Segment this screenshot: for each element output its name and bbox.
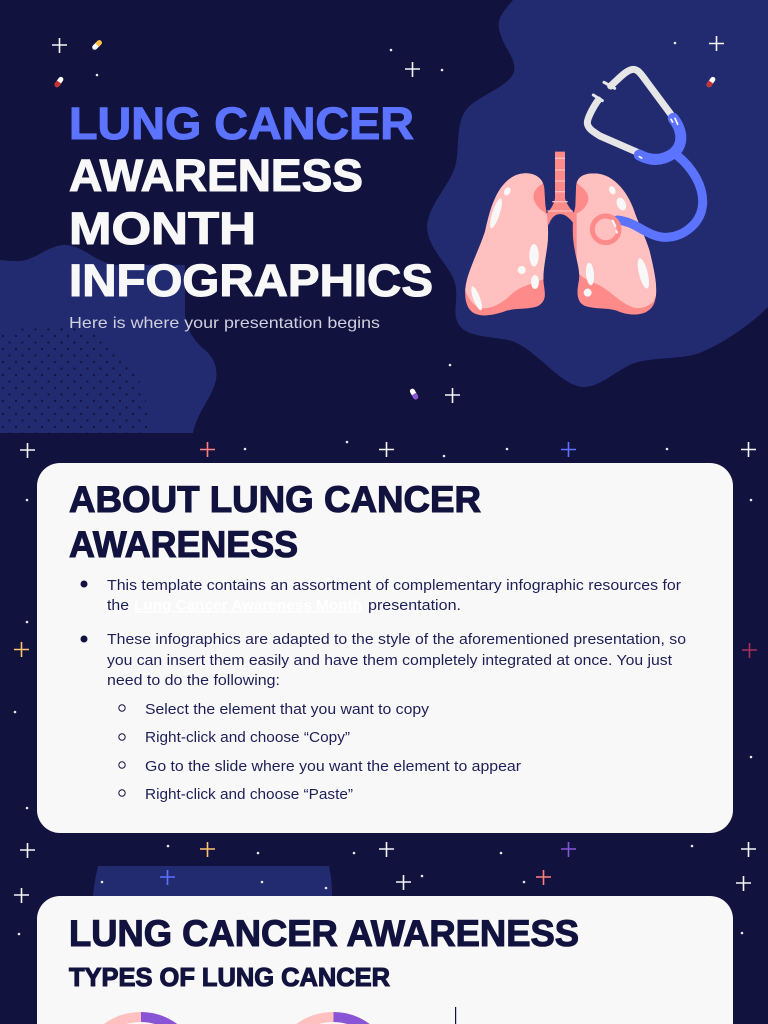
title <box>69 98 433 306</box>
icon: purple pill <box>409 388 419 400</box>
bullet list: need to do the following: <box>107 672 280 689</box>
bullet list: Right-click and choose “Paste” <box>145 786 353 803</box>
blob: behind lower card <box>93 866 332 896</box>
panel: types of lung cancer <box>37 896 733 1024</box>
stethoscope <box>587 69 703 237</box>
trachea and bronchi <box>545 152 576 225</box>
bullet list <box>80 577 686 803</box>
title: LUNG CANCER <box>69 98 414 149</box>
chest piece <box>592 216 619 243</box>
bullet list: Lung Cancer Awareness Month <box>134 597 362 614</box>
heading: about <box>69 479 481 565</box>
title: AWARENESS <box>69 150 363 201</box>
heading: about: ABOUT LUNG CANCER <box>69 479 481 520</box>
bullet list: These infographics are adapted to the style of the aforementioned presentation, so <box>107 631 686 648</box>
panel: about lung cancer awareness <box>37 463 733 833</box>
bullet list: Select the element that you want to copy <box>145 701 430 718</box>
heading: about: AWARENESS <box>69 524 298 565</box>
donut chart 1 <box>104 1012 177 1024</box>
donut chart 2 <box>296 1012 370 1024</box>
title: MONTH <box>69 203 256 254</box>
blob: top right <box>427 0 768 387</box>
left lung <box>465 173 548 316</box>
icon: red pill left <box>54 76 64 88</box>
bullet list: This template contains an assortment of complementary infographic resources for <box>107 577 681 594</box>
icon: yellow pill <box>91 39 103 51</box>
bullet list: presentation. <box>368 597 461 614</box>
blob: left with dot texture <box>0 245 217 433</box>
icon: red pill right <box>706 76 716 88</box>
title: INFOGRAPHICS <box>69 255 433 306</box>
bullet list: the <box>107 597 129 614</box>
heading: lung cancer awareness: LUNG CANCER AWARENESS <box>69 913 579 954</box>
bullet list: you can insert them easily and have them completely integrated at once. You just <box>107 652 673 669</box>
subtitle: Here is where your presentation begins <box>69 315 380 332</box>
illustration: lungs and stethoscope <box>460 69 703 320</box>
bullet list: Right-click and choose “Copy” <box>145 729 350 746</box>
right lung <box>572 173 656 314</box>
vertical divider <box>455 1007 456 1024</box>
bullet list: Go to the slide where you want the element to appear <box>145 758 521 775</box>
subheading: types of lung cancer: TYPES OF LUNG CANCER <box>69 962 390 992</box>
